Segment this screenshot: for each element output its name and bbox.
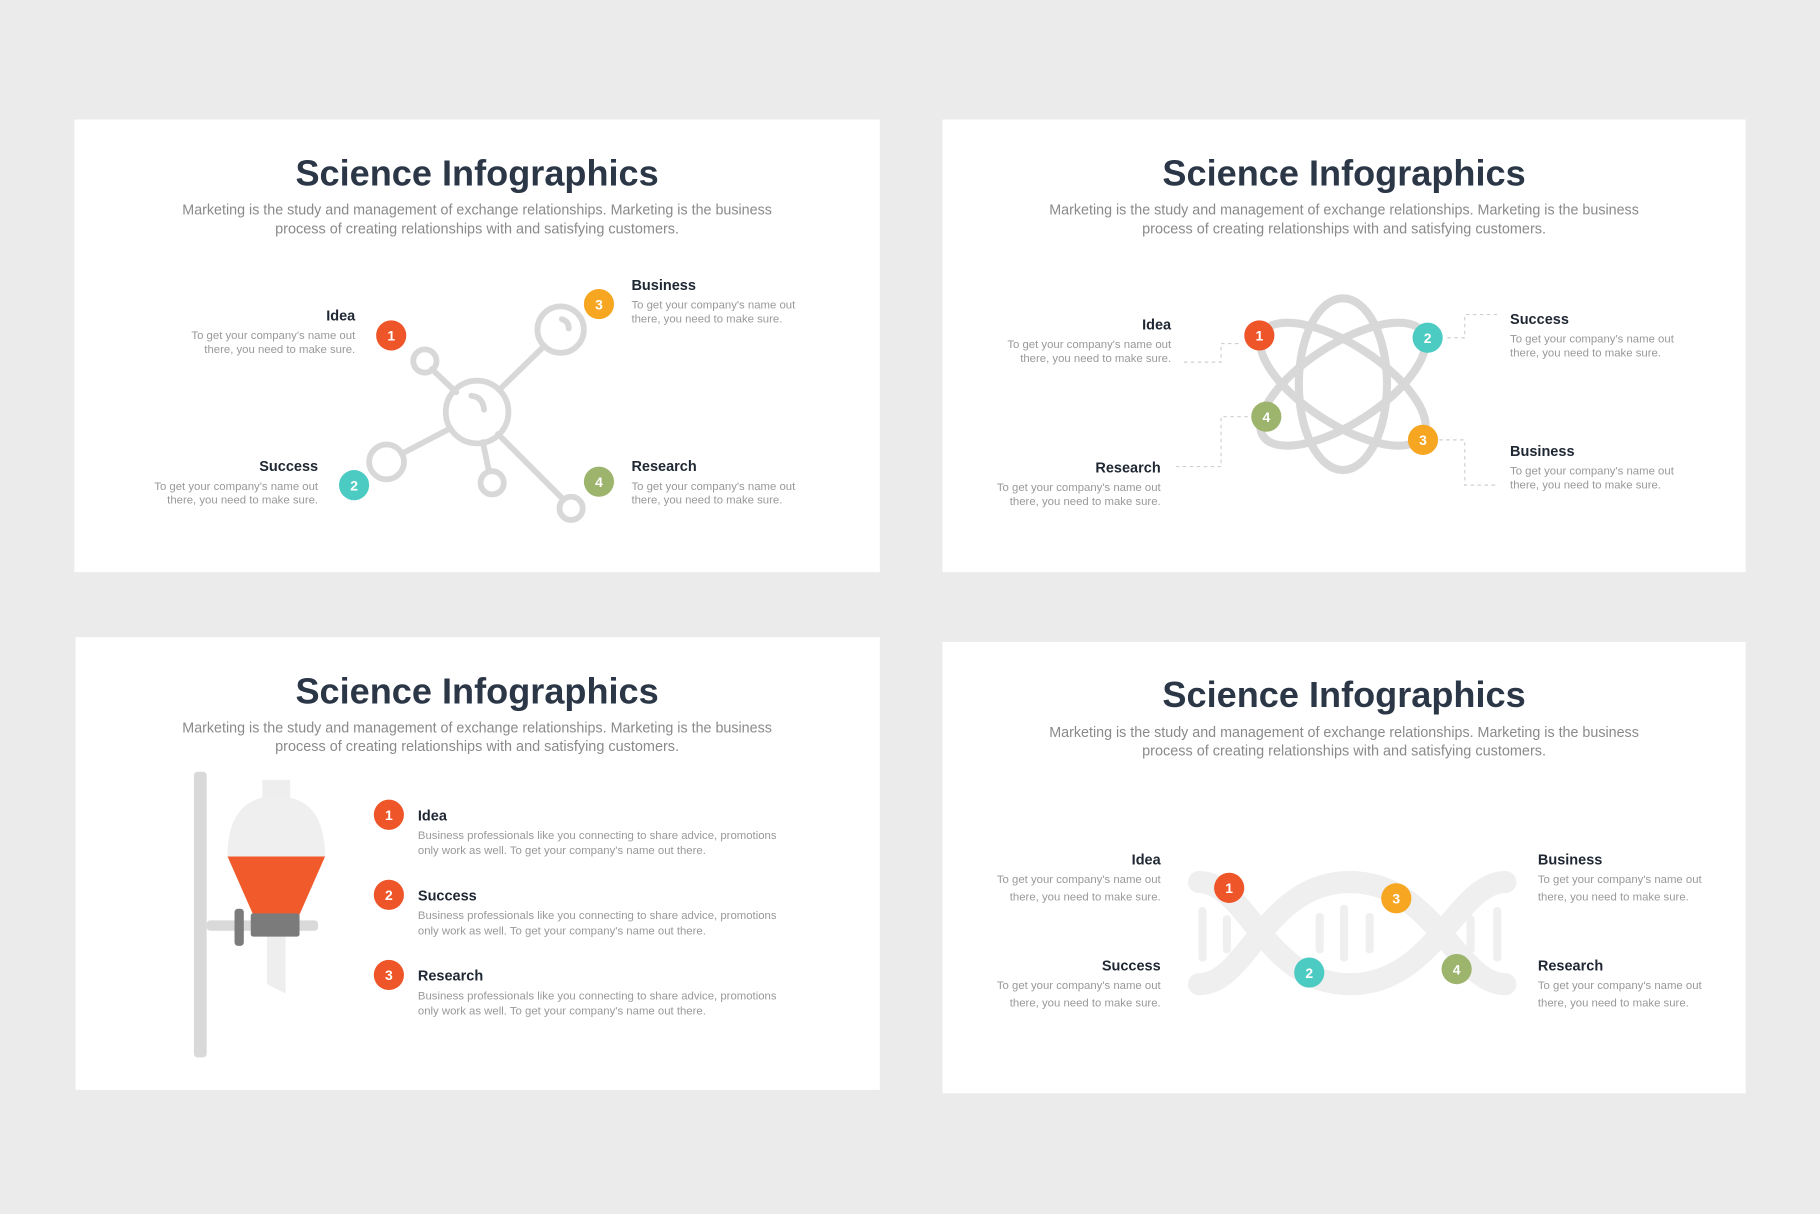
badge 3 Business: Business	[1510, 444, 1575, 460]
badge 2 Success: 2	[350, 477, 358, 493]
badge 4 Research: To get your company's name out	[631, 481, 796, 493]
badge 2 Success: there, you need to make sure.	[1010, 997, 1161, 1009]
list item 2 Success	[374, 880, 777, 937]
badge 2 Success: To get your company's name out	[154, 481, 319, 493]
subtitle: process of creating relationships with and satisfying customers.	[275, 221, 679, 237]
icon: separatory funnel on stand	[194, 772, 325, 1057]
badge 2 Success: 2	[1305, 965, 1313, 981]
badge 3 Business	[1381, 853, 1703, 913]
badge 2 Success: Success	[259, 459, 318, 475]
badge 4 Research: Research	[1095, 460, 1161, 476]
title: Science Infographics	[295, 153, 659, 194]
badge 3 Business: To get your company's name out	[631, 300, 796, 312]
panel: atom	[942, 120, 1746, 572]
list item 3 Research: only work as well. To get your company's name out there.	[418, 1005, 706, 1017]
badge 1 Idea: 1	[1225, 880, 1233, 896]
badge 3 Business	[1408, 425, 1675, 492]
badge 1 Idea	[191, 308, 406, 356]
badge 4 Research: Research	[631, 459, 697, 475]
badge 1 Idea	[997, 853, 1244, 904]
badge 1 Idea: Idea	[326, 308, 356, 324]
title: Science Infographics	[1162, 674, 1526, 715]
badge 4 Research: Research	[1538, 958, 1603, 974]
badge 1 Idea: Idea	[1142, 318, 1172, 334]
badge 2 Success	[997, 958, 1324, 1009]
badge 1 Idea: 1	[1255, 328, 1263, 344]
title: Science Infographics	[295, 670, 659, 711]
subtitle: Marketing is the study and management of exchange relationships. Marketing is the business	[1049, 203, 1639, 219]
subtitle: process of creating relationships with and satisfying customers.	[275, 739, 679, 755]
badge 2 Success: Success	[1510, 312, 1569, 328]
icon: atom	[1242, 298, 1444, 470]
badge 1 Idea: there, you need to make sure.	[204, 344, 355, 356]
subtitle	[182, 203, 772, 237]
subtitle: Marketing is the study and management of exchange relationships. Marketing is the business	[1049, 725, 1639, 741]
list item 2 Success: Success	[418, 889, 477, 905]
badge 3 Business: To get your company's name out	[1510, 466, 1675, 478]
badge 4 Research	[584, 459, 796, 507]
list item 3 Research: 3	[385, 967, 393, 983]
badge 3 Business: 3	[1419, 432, 1427, 448]
badge 2 Success: Success	[1102, 958, 1161, 974]
dashed connectors	[1176, 315, 1497, 485]
badge 1 Idea: To get your company's name out	[997, 874, 1162, 886]
badge 3 Business	[584, 278, 796, 326]
badge 3 Business: 3	[1392, 891, 1400, 907]
list item 3 Research: Business professionals like you connecting to share advice, promotions	[418, 990, 777, 1002]
badge 1 Idea: there, you need to make sure.	[1020, 353, 1171, 365]
list item 1 Idea	[374, 800, 777, 857]
badge 1 Idea: To get your company's name out	[1007, 339, 1172, 351]
badge 1 Idea: To get your company's name out	[191, 330, 356, 342]
list item 1 Idea: Idea	[418, 809, 448, 825]
list item 2 Success: only work as well. To get your company's name out there.	[418, 925, 706, 937]
subtitle: Marketing is the study and management of exchange relationships. Marketing is the business	[182, 720, 772, 736]
list item 1 Idea: only work as well. To get your company's name out there.	[418, 845, 706, 857]
badge 1 Idea: there, you need to make sure.	[1010, 892, 1161, 904]
badge 2 Success: there, you need to make sure.	[1510, 347, 1661, 359]
icon: DNA helix	[1199, 882, 1505, 984]
panel: molecule	[74, 120, 880, 572]
badge 4 Research	[997, 402, 1281, 508]
subtitle: process of creating relationships with and satisfying customers.	[1142, 744, 1546, 760]
badge 2 Success	[154, 459, 369, 507]
badge 2 Success	[1413, 312, 1675, 359]
badge 2 Success: To get your company's name out	[997, 980, 1162, 992]
badge 1 Idea	[1007, 318, 1274, 365]
subtitle	[182, 720, 772, 755]
badge 4 Research: 4	[595, 474, 603, 490]
badge 4 Research: 4	[1262, 409, 1270, 425]
subtitle: Marketing is the study and management of exchange relationships. Marketing is the business	[182, 203, 772, 219]
list item 3 Research	[374, 960, 777, 1017]
badge 3 Business: there, you need to make sure.	[1538, 892, 1689, 904]
badge 2 Success: To get your company's name out	[1510, 333, 1675, 345]
subtitle: process of creating relationships with and satisfying customers.	[1142, 221, 1546, 237]
badge 3 Business: 3	[595, 296, 603, 312]
badge 3 Business: Business	[1538, 853, 1602, 869]
badge 4 Research: there, you need to make sure.	[1538, 997, 1689, 1009]
icon: molecule	[369, 306, 584, 520]
badge 4 Research: there, you need to make sure.	[631, 495, 782, 507]
badge 3 Business: there, you need to make sure.	[631, 314, 782, 326]
badge 2 Success: there, you need to make sure.	[167, 495, 318, 507]
badge 3 Business: there, you need to make sure.	[1510, 480, 1661, 492]
badge 2 Success: 2	[1424, 330, 1432, 346]
badge 3 Business: To get your company's name out	[1538, 874, 1703, 886]
list item 2 Success: 2	[385, 887, 393, 903]
subtitle	[1049, 203, 1639, 237]
badge 4 Research	[1442, 954, 1703, 1009]
badge 1 Idea: Idea	[1132, 853, 1162, 869]
title: Science Infographics	[1162, 153, 1526, 194]
subtitle	[1049, 725, 1639, 760]
badge 4 Research: 4	[1453, 961, 1461, 977]
badge 3 Business: Business	[631, 278, 696, 294]
list item 3 Research: Research	[418, 969, 483, 985]
badge 4 Research: there, you need to make sure.	[1010, 496, 1161, 508]
badge 1 Idea: 1	[387, 328, 395, 344]
list item 1 Idea: 1	[385, 807, 393, 823]
panel: DNA	[942, 642, 1746, 1093]
badge 4 Research: To get your company's name out	[997, 482, 1162, 494]
list item 1 Idea: Business professionals like you connecting to share advice, promotions	[418, 830, 777, 842]
list item 2 Success: Business professionals like you connecting to share advice, promotions	[418, 910, 777, 922]
panel: flask	[76, 637, 880, 1090]
badge 4 Research: To get your company's name out	[1538, 980, 1703, 992]
